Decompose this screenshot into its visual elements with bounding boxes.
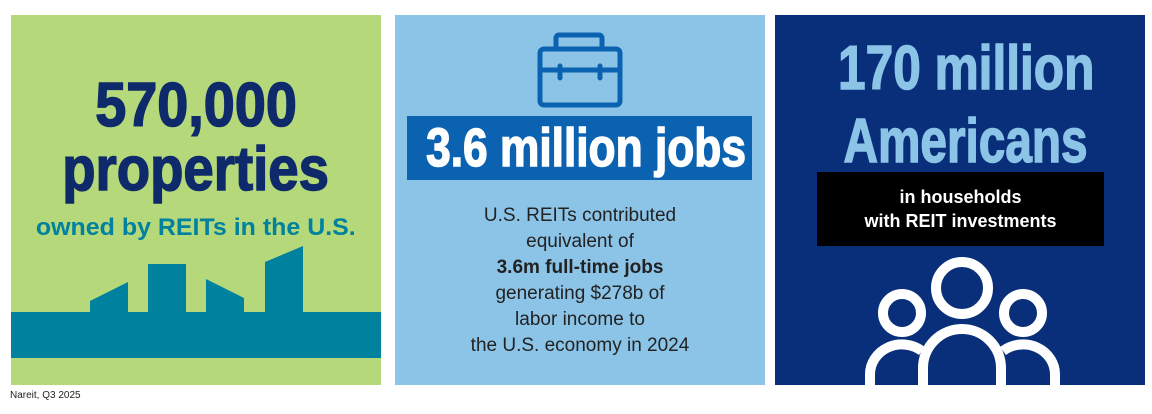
- panel: jobs: [395, 15, 765, 385]
- body text: the U.S. economy in 2024: [471, 335, 689, 356]
- body text: labor income to: [515, 309, 645, 330]
- body text: U.S. REITs contributed: [484, 205, 676, 226]
- subheading: owned by REITs in the U.S.: [36, 214, 356, 241]
- black label box: in households: [899, 187, 1022, 207]
- body text: 3.6m full-time jobs: [497, 257, 663, 278]
- icon: people: [865, 257, 1060, 385]
- black label box: [817, 172, 1104, 246]
- panel: Americans: Americans: [844, 107, 1088, 176]
- panel: properties: properties: [63, 135, 329, 204]
- icon: briefcase: [538, 32, 622, 108]
- black label box: with REIT investments: [864, 211, 1057, 231]
- body text: generating $278b of: [495, 283, 665, 304]
- body text: [470, 205, 689, 356]
- panel: jobs: 3.6 million jobs: [426, 118, 746, 178]
- source note: Nareit, Q3 2025: [10, 390, 81, 401]
- banner: 3.6 million jobs: [407, 116, 752, 180]
- heading: 570,000 properties: 570,000: [95, 71, 297, 140]
- panel: Americans: [775, 15, 1145, 385]
- icon: skyline: [11, 246, 381, 358]
- body text: equivalent of: [526, 231, 634, 252]
- heading: 170 million Americans: 170 million: [838, 34, 1094, 103]
- panel: properties: [11, 15, 381, 385]
